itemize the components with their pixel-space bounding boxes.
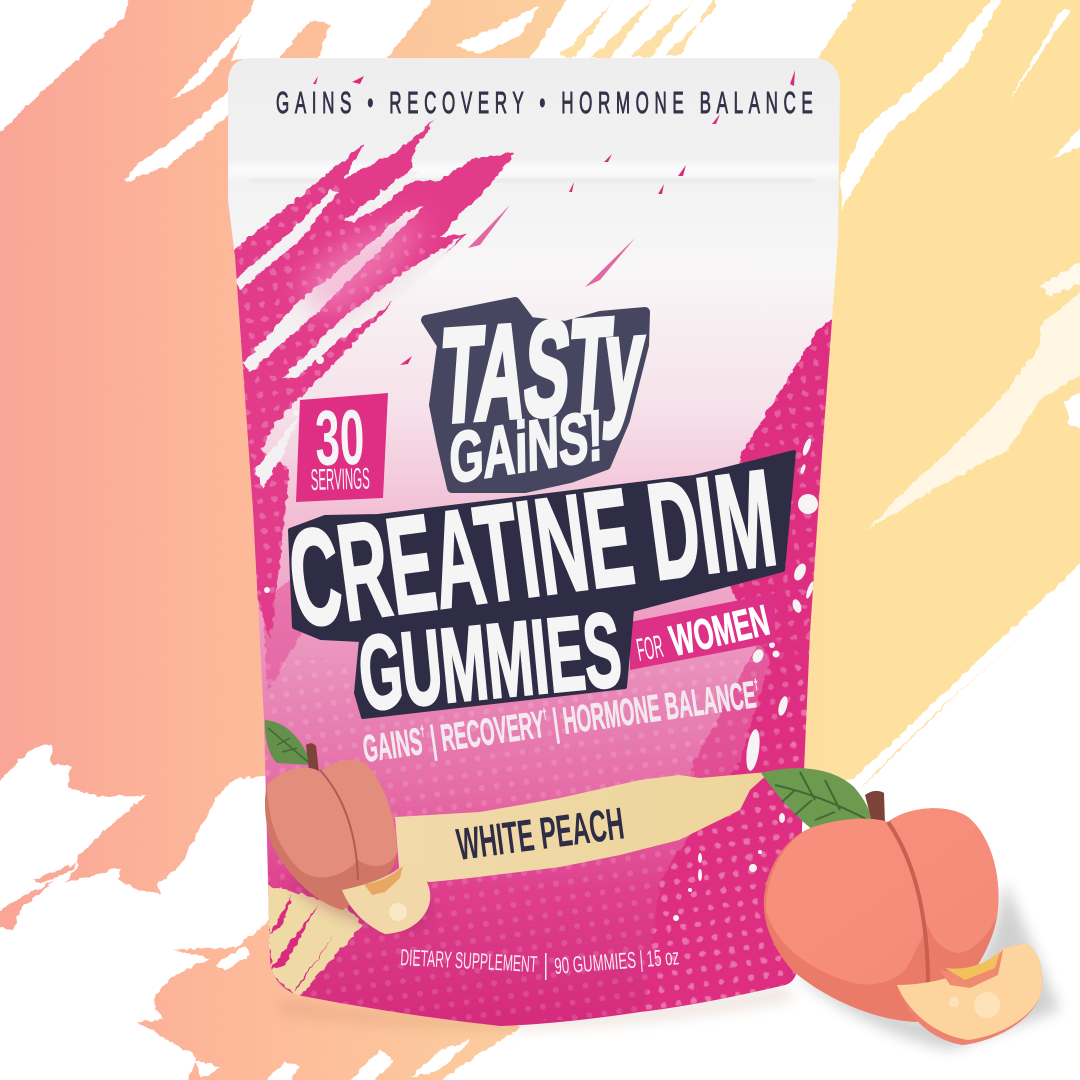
cream brush lower left xyxy=(266,885,362,997)
benefits line: GAINS† | RECOVERY† | HORMONE BALANCE† xyxy=(360,674,762,771)
thin yellow and peach streak fringe xyxy=(560,0,1033,788)
lower halftone band xyxy=(262,660,822,1020)
white brush streaks xyxy=(235,170,461,490)
dark title outline xyxy=(290,452,794,717)
peach shadow xyxy=(790,880,1060,1050)
gummies text: GUMMIES xyxy=(354,591,626,733)
peach body xyxy=(764,808,998,1022)
flavor brush banner: WHITE PEACH xyxy=(454,797,627,870)
leaf xyxy=(761,768,872,830)
30 servings badge: SERVINGS xyxy=(310,462,370,497)
footer text: 90 GUMMIES | 15 oz xyxy=(553,943,680,979)
stem xyxy=(865,791,885,824)
logo: Tasty Gains: GAiNS! xyxy=(449,394,603,498)
icon: large peach xyxy=(761,768,1060,1050)
for women label: FOR xyxy=(634,628,666,668)
for women label: WOMEN xyxy=(665,596,774,666)
logo: Tasty Gains: TASTy xyxy=(436,289,648,451)
upper left pink brush xyxy=(230,120,845,1040)
seal band xyxy=(232,166,839,177)
flavor brush banner xyxy=(395,772,770,882)
logo: Tasty Gains xyxy=(426,289,648,498)
paint splatter xyxy=(264,356,818,921)
footer text: DIETARY SUPPLEMENT xyxy=(400,944,538,977)
tagline: GAINS • RECOVERY • HORMONE BALANCE xyxy=(276,86,818,120)
small peach shadow xyxy=(285,880,435,930)
mid streak area xyxy=(263,580,302,691)
30 servings badge xyxy=(296,393,388,502)
product pouch xyxy=(228,58,845,1040)
right pink field xyxy=(640,310,845,1040)
soft highlight in pink brush xyxy=(300,215,430,315)
pouch body xyxy=(228,58,840,1026)
product name xyxy=(281,441,794,733)
logo outline blob xyxy=(426,302,645,488)
pouch artwork xyxy=(228,70,845,1040)
30 servings badge: 30 xyxy=(314,393,365,482)
for women label xyxy=(630,593,775,670)
pouch shadow xyxy=(280,985,790,1028)
icon: peach on pouch xyxy=(265,720,435,934)
peach slice xyxy=(897,943,1042,1045)
pink specks xyxy=(313,70,795,375)
